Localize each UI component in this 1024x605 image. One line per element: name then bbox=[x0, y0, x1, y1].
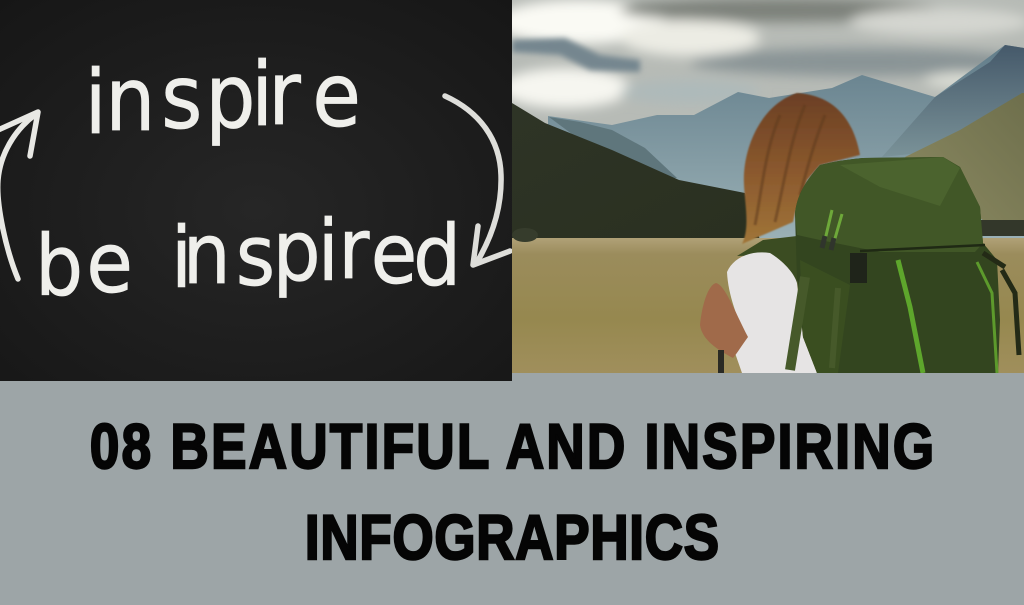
grass field bbox=[512, 238, 1024, 373]
panel: hiker photo bbox=[495, 0, 1024, 373]
grey title band background bbox=[0, 373, 1024, 605]
title bbox=[90, 412, 934, 573]
hair bbox=[742, 93, 860, 244]
left dark hills bbox=[512, 103, 760, 240]
lid flap bbox=[840, 157, 960, 206]
blue-grey cloud band bbox=[512, 38, 640, 72]
zips bbox=[898, 260, 923, 373]
hand bbox=[700, 283, 748, 358]
shoulder strap bbox=[737, 236, 797, 285]
pole strap bbox=[718, 350, 724, 373]
lower pocket highlight bbox=[800, 260, 850, 373]
pack body bbox=[795, 157, 1000, 373]
clouds bbox=[495, 0, 1024, 108]
lower right treeline bbox=[981, 220, 1024, 236]
small tree bbox=[512, 228, 538, 242]
far mountains bbox=[548, 45, 1024, 240]
side strap bbox=[983, 253, 1019, 355]
shirt bbox=[727, 252, 817, 373]
pack lid bbox=[795, 157, 983, 252]
icon: right curved arrow bbox=[445, 96, 510, 265]
buckle bbox=[850, 253, 867, 283]
chalk words: be inspired: be inspired bbox=[35, 200, 461, 315]
straps bbox=[790, 277, 805, 370]
backpack bbox=[790, 157, 1019, 373]
sky bbox=[512, 0, 1024, 125]
hair strands bbox=[755, 105, 825, 225]
green pulls bbox=[825, 210, 842, 242]
title line 1: 08 BEAUTIFUL AND INSPIRING bbox=[90, 412, 934, 482]
right hill bbox=[905, 93, 1024, 222]
title line 2: INFOGRAPHICS bbox=[305, 503, 719, 573]
mid hill bbox=[549, 117, 677, 180]
dark right mountain bbox=[882, 45, 1024, 157]
panel: chalkboard photo bbox=[0, 0, 512, 381]
dark waist band bbox=[860, 245, 985, 251]
chalk word: inspire: inspire bbox=[85, 42, 361, 154]
icon: left curved arrow bbox=[0, 112, 38, 279]
